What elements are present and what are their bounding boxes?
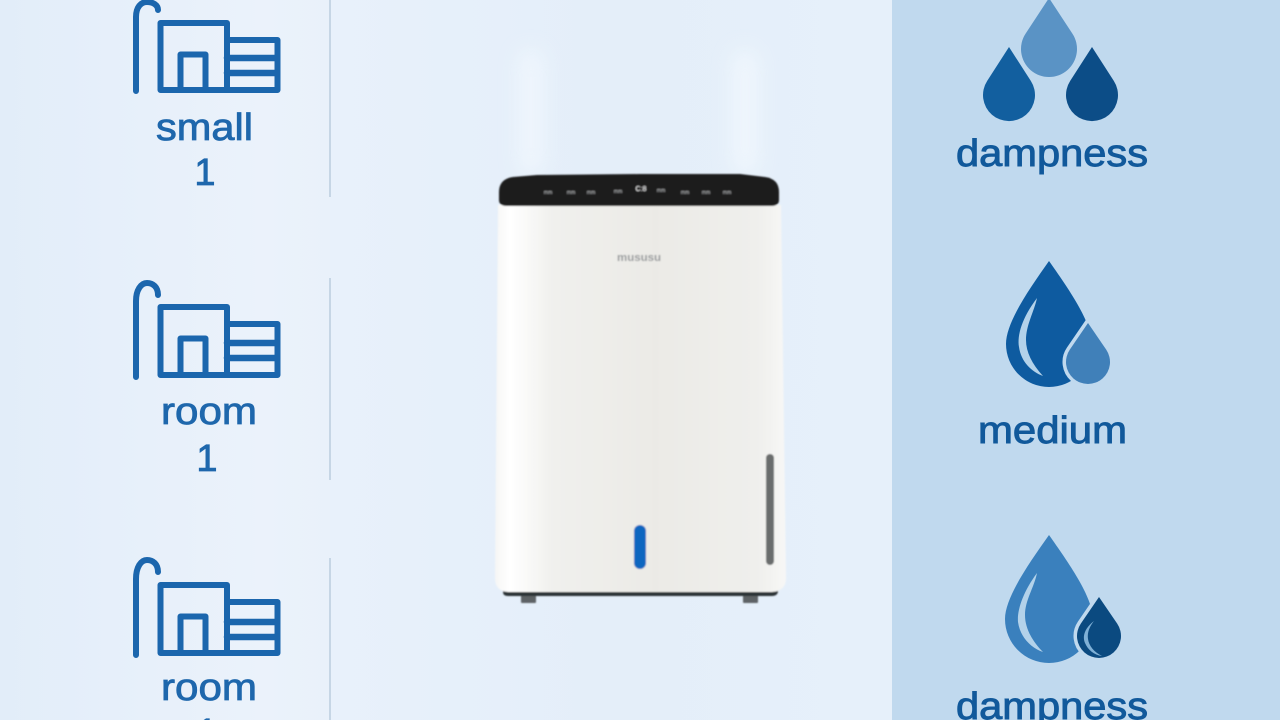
label: medium: medium [978, 410, 1127, 452]
control panel labels: mm [702, 190, 710, 196]
blue water level indicator [634, 525, 646, 569]
label: 1: 1 [194, 152, 216, 194]
label: dampness: dampness [956, 133, 1148, 175]
white body [495, 205, 786, 592]
icon: large and small drop [1006, 261, 1110, 387]
icon: left steam plume [520, 50, 542, 175]
group: lower dampness drops [956, 535, 1148, 720]
control panel labels: mm [657, 188, 665, 194]
icon: large light drop and small dark drop [1005, 535, 1121, 663]
panel: center background [330, 0, 892, 720]
panel: left column background [0, 0, 330, 720]
row: room 2 [136, 560, 278, 720]
row: small room [136, 2, 278, 194]
control panel labels [544, 186, 731, 196]
icon: room floorplan 1 [136, 2, 278, 91]
control panel labels: mm [567, 190, 575, 196]
label: room: room [161, 391, 257, 433]
side handle slot [766, 454, 774, 565]
icon: room floorplan 3 [136, 560, 278, 655]
group: dampness drops [956, 0, 1148, 175]
control panel labels: mm [587, 190, 595, 196]
brand logo: mususu [617, 252, 661, 264]
icon: room floorplan 2 [136, 283, 278, 377]
control panel labels: mm [681, 190, 689, 196]
black control top [499, 174, 779, 206]
control panel labels: mm [544, 190, 552, 196]
icon: right steam plume [733, 50, 757, 175]
icon: three water drops [983, 0, 1118, 121]
row: room 1 [136, 283, 278, 480]
feet [521, 594, 758, 603]
control panel labels: C:8 [636, 186, 647, 193]
label: room: room [161, 667, 257, 709]
control panel labels: mm [614, 189, 622, 195]
dehumidifier [495, 174, 786, 603]
panel: right column background [892, 0, 1280, 720]
control panel labels: mm [723, 190, 731, 196]
label: 1: 1 [196, 438, 218, 480]
group: medium drops [978, 261, 1127, 452]
base strip [503, 590, 778, 596]
label: small: small [156, 107, 253, 149]
